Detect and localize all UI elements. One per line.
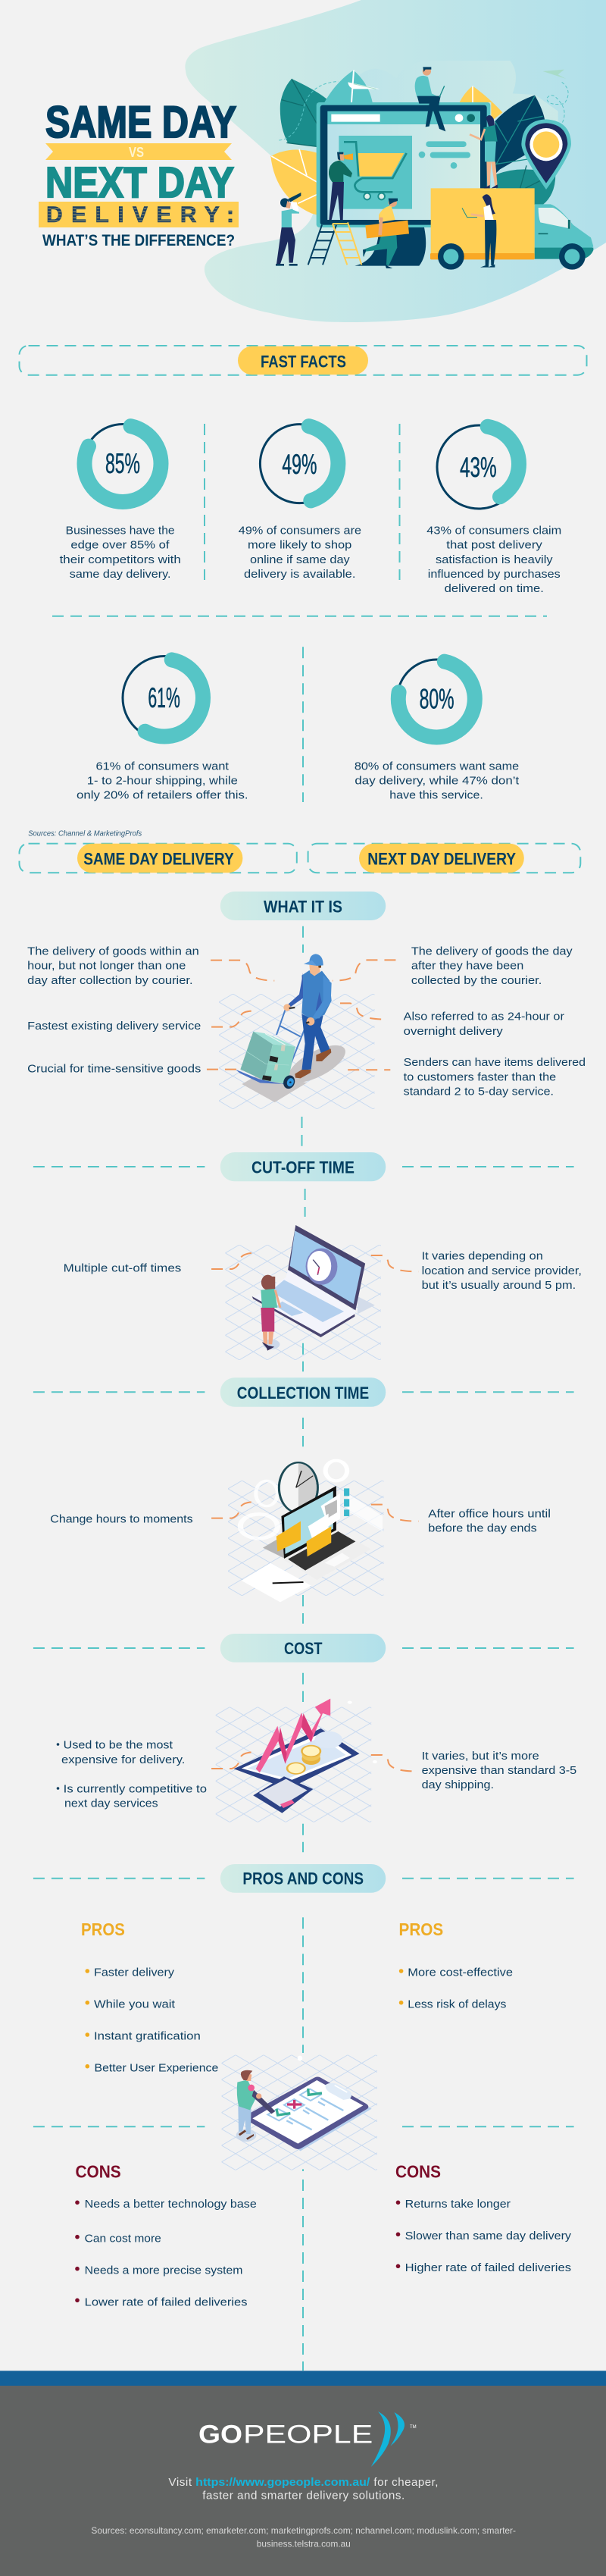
title <box>39 98 239 249</box>
sources note: Sources: Channel & MarketingProfs <box>28 829 142 838</box>
footer sources: Sources: econsultancy.com; emarketer.com; marketingprofs.com; nchannel.com; moduslink.com; smarter- <box>91 2525 516 2536</box>
list: next day cons: Slower than same day delivery <box>405 2230 572 2242</box>
header illustration: online store and delivery van <box>270 61 593 270</box>
text: next day, what it is: after they have been <box>411 960 523 973</box>
text: next day, cut-off time: location and service provider, <box>422 1264 582 1277</box>
text: next day, cut-off time: but it’s usually around 5 pm. <box>422 1279 576 1292</box>
list: next day pros: PROS <box>398 1919 443 1939</box>
footer sources: business.telstra.com.au <box>257 2538 351 2549</box>
text: same day, what it is <box>27 945 201 1076</box>
heading: next day delivery: NEXT DAY DELIVERY <box>367 850 516 869</box>
stat: 49%: more likely to shop <box>248 539 351 552</box>
list: same day pros: PROS <box>81 1919 125 1939</box>
text: same day, what it is: day after collection by courier. <box>27 974 193 987</box>
call to action: faster and smarter delivery solutions. <box>202 2489 405 2502</box>
stat: 43%: 43% of consumers claim <box>426 524 561 537</box>
stat: 43%: satisfaction is heavily <box>436 553 553 566</box>
text: same day, cost: Is currently competitive to <box>64 1782 207 1795</box>
heading: what it is <box>220 892 386 920</box>
connectors: collection time <box>211 1502 419 1521</box>
stat: 49% <box>239 417 361 581</box>
list: next day cons: CONS <box>395 2162 441 2182</box>
list: same day cons: Can cost more <box>85 2232 161 2245</box>
stat: 85%: Businesses have the <box>66 524 175 537</box>
stat: 80%: have this service. <box>389 789 483 802</box>
stat: 61% <box>77 653 248 802</box>
illustration: laptop with clock and woman <box>225 1225 381 1360</box>
stat: 61%: 61% of consumers want <box>95 760 230 772</box>
title line: same day: SAME DAY <box>45 98 236 147</box>
heading: fast facts <box>20 346 586 375</box>
list: next day pros: Less risk of delays <box>408 1998 506 2011</box>
call to action <box>168 2476 439 2502</box>
stat: 43%: that post delivery <box>446 539 542 552</box>
text: next day, collection time <box>428 1507 551 1534</box>
call to action: https://www.gopeople.com.au/ <box>195 2476 370 2489</box>
list: next day cons <box>395 2162 572 2274</box>
list: same day pros: While you wait <box>94 1998 176 2011</box>
text: next day, cut-off time: It varies depending on <box>422 1250 543 1263</box>
list: same day cons: Lower rate of failed deliveries <box>85 2296 247 2308</box>
text: next day, collection time: After office hours until <box>428 1507 551 1520</box>
text: same day, collection time: Change hours to moments <box>50 1512 193 1525</box>
stat: 80%: 80% of consumers want same <box>355 760 519 772</box>
text: next day, what it is: to customers faster than the <box>404 1071 556 1084</box>
text: next day, cost: expensive than standard 3-5 <box>422 1764 576 1777</box>
stat: 80% <box>355 653 520 802</box>
text: next day, what it is: Also referred to as 24-hour or <box>404 1011 564 1023</box>
stat: 49%: 49% of consumers are <box>239 524 361 537</box>
heading: collection time: COLLECTION TIME <box>237 1384 369 1402</box>
logo: go people <box>198 2411 417 2467</box>
call to action: Visit <box>168 2476 192 2489</box>
text: next day, cost: day shipping. <box>422 1778 494 1791</box>
text: next day, what it is <box>404 945 586 1098</box>
illustration: man ticking a checklist <box>221 2055 377 2171</box>
list: same day cons: CONS <box>76 2162 121 2182</box>
stat: 80%: 80% <box>420 684 454 715</box>
heading: cost <box>220 1634 386 1662</box>
ribbon: vs: VS <box>129 145 144 160</box>
footer <box>0 2371 606 2576</box>
list: next day cons: Higher rate of failed deliveries <box>405 2261 571 2274</box>
stat: 43% <box>426 420 561 595</box>
heading: what it is: WHAT IT IS <box>264 897 342 916</box>
heading: pros and cons <box>220 1864 386 1893</box>
heading: next day delivery <box>308 844 580 873</box>
text: next day, what it is: standard 2 to 5-day service. <box>404 1086 554 1098</box>
call to action: for cheaper, <box>373 2476 439 2489</box>
title line: delivery: DELIVERY: <box>46 202 234 227</box>
heading: pros and cons: PROS AND CONS <box>242 1869 364 1888</box>
list: same day cons <box>75 2162 257 2308</box>
text: next day, what it is: overnight delivery <box>404 1025 503 1038</box>
logo: go people: TM <box>410 2425 417 2430</box>
stat: 85% <box>60 418 181 581</box>
heading: same day delivery <box>20 844 297 873</box>
text: same day, cost: Used to be the most <box>64 1739 173 1752</box>
stat: 49%: 49% <box>282 449 317 480</box>
text: next day, cost <box>422 1750 576 1791</box>
text: same day, cost: next day services <box>64 1797 158 1810</box>
stat: 49%: online if same day <box>250 553 350 566</box>
list: next day pros: More cost-effective <box>408 1966 513 1979</box>
footer sources <box>91 2525 516 2549</box>
heading: cut-off time <box>220 1152 386 1181</box>
text: same day, what it is: hour, but not longer than one <box>27 960 186 973</box>
subtitle: WHAT’S THE DIFFERENCE? <box>42 232 235 249</box>
stat: 61%: 61% <box>148 682 180 713</box>
text: next day, cost: It varies, but it’s more <box>422 1750 539 1763</box>
stat: 43%: delivered on time. <box>445 582 544 595</box>
heading: fast facts: FAST FACTS <box>261 352 346 371</box>
logo: go people: PEOPLE <box>243 2420 373 2449</box>
text: same day, what it is: Fastest existing delivery service <box>27 1020 201 1033</box>
stat: 43%: influenced by purchases <box>428 568 561 581</box>
stat: 85%: edge over 85% of <box>70 539 170 552</box>
connectors: what it is <box>207 960 395 1070</box>
text: same day, cost: expensive for delivery. <box>61 1753 185 1766</box>
text: next day, what it is: The delivery of goods the day <box>411 945 573 957</box>
ribbon: vs <box>45 143 232 160</box>
illustration: courier with hand truck <box>219 954 374 1109</box>
text: next day, what it is: collected by the courier. <box>411 974 542 987</box>
stat: 61%: only 20% of retailers offer this. <box>77 789 248 802</box>
title line: next day: NEXT DAY <box>45 158 234 207</box>
stat: 85%: same day delivery. <box>70 568 171 581</box>
heading: cut-off time: CUT-OFF TIME <box>251 1158 355 1177</box>
illustration: chart arrow, calculator and coins <box>216 1699 377 1822</box>
illustration: laptop with clock, envelopes and gears <box>228 1461 383 1602</box>
list: next day pros <box>398 1919 513 2011</box>
list: same day pros: Better User Experience <box>94 2062 218 2075</box>
stat: 85%: their competitors with <box>60 553 181 566</box>
list: same day cons: Needs a more precise system <box>85 2264 242 2277</box>
heading: cost: COST <box>284 1639 323 1658</box>
stat: 80%: day delivery, while 47% don’t <box>355 775 520 788</box>
heading: same day delivery: SAME DAY DELIVERY <box>83 850 234 869</box>
text: same day, cost <box>57 1739 207 1810</box>
text: next day, what it is: Senders can have items delivered <box>404 1056 586 1069</box>
text: next day, cut-off time <box>422 1250 582 1292</box>
stat: 49%: delivery is available. <box>244 568 355 581</box>
list: next day cons: Returns take longer <box>405 2198 511 2211</box>
text: next day, collection time: before the day ends <box>428 1521 537 1534</box>
text: same day, what it is: Crucial for time-sensitive goods <box>27 1063 201 1076</box>
logo: go people: GO <box>198 2420 242 2449</box>
stat: 43%: 43% <box>460 452 497 483</box>
list: same day cons: Needs a better technology base <box>85 2198 257 2211</box>
text: same day, what it is: The delivery of goods within an <box>27 945 199 957</box>
connectors: cost <box>211 1752 419 1772</box>
list: same day pros <box>81 1919 218 2075</box>
list: same day pros: Instant gratification <box>94 2030 201 2043</box>
connectors: cut-off time <box>211 1252 419 1271</box>
heading: collection time <box>220 1377 386 1407</box>
text: same day, cut-off time: Multiple cut-off times <box>64 1262 181 1275</box>
stat: 61%: 1- to 2-hour shipping, while <box>87 775 238 788</box>
header background blob <box>185 0 606 322</box>
list: same day pros: Faster delivery <box>94 1966 175 1979</box>
stat: 85%: 85% <box>105 448 140 479</box>
